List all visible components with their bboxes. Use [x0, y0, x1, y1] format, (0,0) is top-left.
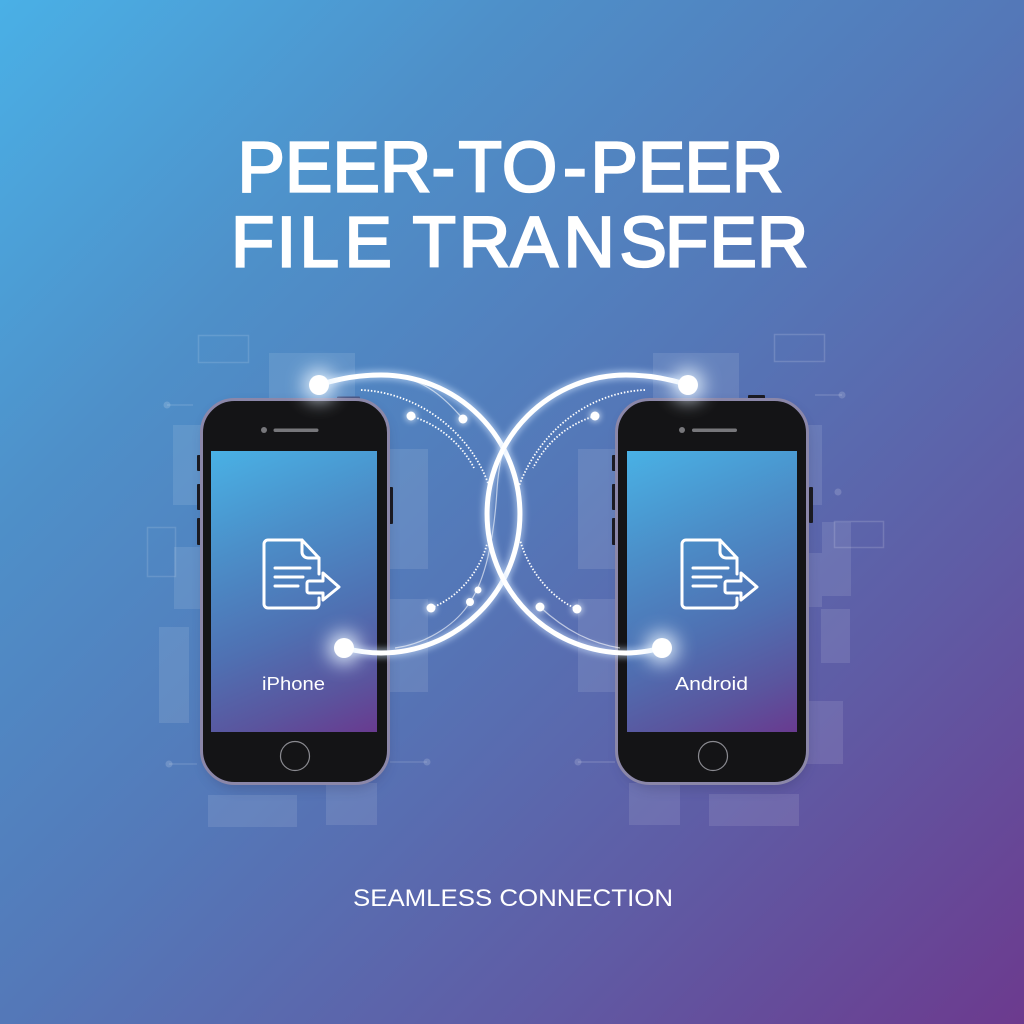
dotted traces	[519, 390, 645, 609]
phone: iPhone	[197, 396, 393, 789]
title: PEER-TO-PEER	[238, 128, 783, 208]
home button	[698, 742, 728, 770]
dotted traces	[361, 390, 489, 608]
caption: SEAMLESS CONNECTION	[353, 885, 673, 912]
icon: file transfer	[682, 540, 757, 608]
background decoration: right	[574, 334, 884, 826]
connection: left arc	[319, 375, 520, 653]
title	[231, 128, 808, 282]
connection nodes	[303, 369, 704, 664]
side buttons	[612, 395, 813, 545]
phone body	[202, 400, 388, 784]
screen	[211, 451, 377, 732]
label: Android: Android	[675, 674, 748, 694]
label: iPhone: iPhone	[262, 674, 325, 694]
title: FILE TRANSFER	[231, 204, 808, 282]
home button	[280, 742, 310, 770]
side buttons	[197, 455, 393, 545]
camera and speaker	[679, 427, 737, 433]
connection: right arc	[487, 375, 688, 653]
camera and speaker	[261, 427, 318, 433]
phone: Android	[612, 395, 813, 789]
screen	[627, 451, 797, 732]
background decoration: left	[148, 336, 430, 827]
icon: file transfer	[264, 540, 339, 608]
top button	[337, 396, 360, 400]
phone body	[616, 400, 808, 784]
thin traces	[540, 607, 620, 648]
thin traces	[395, 376, 503, 648]
